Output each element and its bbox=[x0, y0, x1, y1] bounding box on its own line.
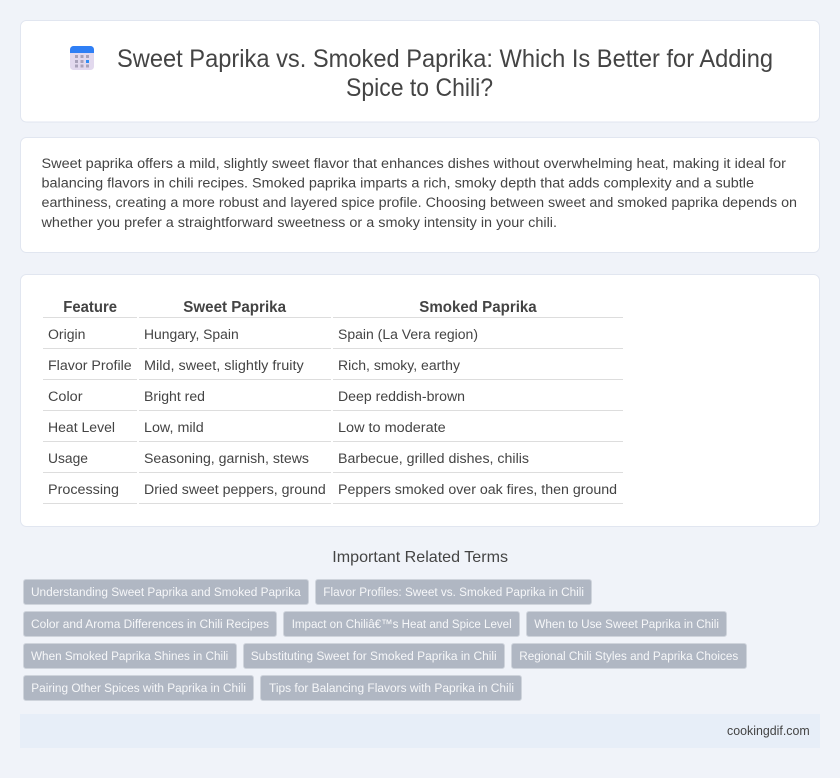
panel: header bbox=[20, 20, 820, 122]
tag bbox=[316, 580, 592, 604]
row: color: Color bbox=[48, 389, 83, 405]
row: processing: Dried sweet peppers, ground bbox=[144, 482, 326, 498]
tag bbox=[24, 644, 236, 668]
tag bbox=[24, 676, 254, 700]
tag bbox=[260, 676, 522, 700]
footer bar bbox=[20, 714, 820, 748]
tag: When to Use Sweet Paprika in Chili bbox=[534, 617, 719, 631]
tag bbox=[244, 644, 504, 668]
row: origin bbox=[48, 327, 478, 343]
row: color bbox=[48, 389, 465, 405]
table header row: Feature bbox=[63, 299, 117, 316]
icon: calendar bbox=[70, 46, 94, 70]
table header row bbox=[63, 299, 537, 316]
row: heat level bbox=[48, 420, 446, 436]
tag bbox=[512, 644, 746, 668]
row: flavor profile: Mild, sweet, slightly fruity bbox=[144, 358, 305, 374]
tag: Substituting Sweet for Smoked Paprika in Chili bbox=[251, 649, 497, 663]
row: color: Deep reddish-brown bbox=[338, 389, 465, 405]
tag: When Smoked Paprika Shines in Chili bbox=[31, 649, 228, 663]
footer source text: cookingdif.com bbox=[727, 724, 810, 738]
row: origin: Hungary, Spain bbox=[144, 327, 239, 343]
row: processing bbox=[48, 482, 617, 498]
row: heat level: Low, mild bbox=[144, 420, 204, 436]
intro paragraph: Sweet paprika offers a mild, slightly sweet flavor that enhances dishes without overwhelming heat, making it ideal for bbox=[42, 156, 786, 172]
tag bbox=[526, 612, 726, 636]
table header row: Sweet Paprika bbox=[183, 299, 286, 316]
tag: Color and Aroma Differences in Chili Recipes bbox=[31, 617, 269, 631]
tag: Regional Chili Styles and Paprika Choices bbox=[519, 649, 738, 663]
tag: Impact on Chiliâ€™s Heat and Spice Level bbox=[292, 617, 512, 631]
title: Sweet Paprika vs. Smoked Paprika: Which Is Better for Adding bbox=[117, 45, 773, 73]
tag bbox=[24, 612, 276, 636]
row: usage bbox=[48, 451, 529, 467]
row: flavor profile: Flavor Profile bbox=[48, 358, 132, 374]
tag: Understanding Sweet Paprika and Smoked Paprika bbox=[31, 585, 301, 599]
table header row: Smoked Paprika bbox=[419, 299, 537, 316]
tag: Flavor Profiles: Sweet vs. Smoked Paprika in Chili bbox=[323, 585, 584, 599]
panel: comparison table bbox=[20, 274, 820, 526]
row: heat level: Heat Level bbox=[48, 420, 115, 436]
intro paragraph: whether you prefer a straightforward sweetness or a smoky intensity in your chili. bbox=[40, 215, 557, 231]
row: processing: Processing bbox=[48, 482, 119, 498]
row: flavor profile bbox=[48, 358, 461, 374]
row: origin: Origin bbox=[48, 327, 86, 343]
row: usage: Barbecue, grilled dishes, chilis bbox=[338, 451, 529, 467]
row: processing: Peppers smoked over oak fires, then ground bbox=[338, 482, 617, 498]
intro paragraph: earthiness, creating a more robust and layered spice profile. Choosing between sweet and smoked paprika depends on bbox=[42, 195, 797, 211]
related terms tags bbox=[24, 580, 746, 700]
heading: important related terms: Important Related Terms bbox=[332, 549, 508, 566]
title: Spice to Chili? bbox=[346, 74, 493, 102]
tag bbox=[284, 612, 520, 636]
intro paragraph: balancing flavors in chili recipes. Smoked paprika imparts a rich, smoky depth that adds complexity and a subtle bbox=[42, 176, 754, 192]
row: color: Bright red bbox=[144, 389, 205, 405]
title bbox=[117, 45, 773, 102]
tag: Pairing Other Spices with Paprika in Chili bbox=[31, 681, 246, 695]
row: heat level: Low to moderate bbox=[338, 420, 446, 436]
panel: introduction text bbox=[20, 138, 820, 252]
row: usage: Seasoning, garnish, stews bbox=[144, 451, 309, 467]
intro paragraph bbox=[40, 156, 797, 231]
row: usage: Usage bbox=[48, 451, 88, 467]
row: flavor profile: Rich, smoky, earthy bbox=[338, 358, 461, 374]
tag bbox=[24, 580, 308, 604]
tag: Tips for Balancing Flavors with Paprika in Chili bbox=[269, 681, 514, 695]
row: origin: Spain (La Vera region) bbox=[338, 327, 478, 343]
